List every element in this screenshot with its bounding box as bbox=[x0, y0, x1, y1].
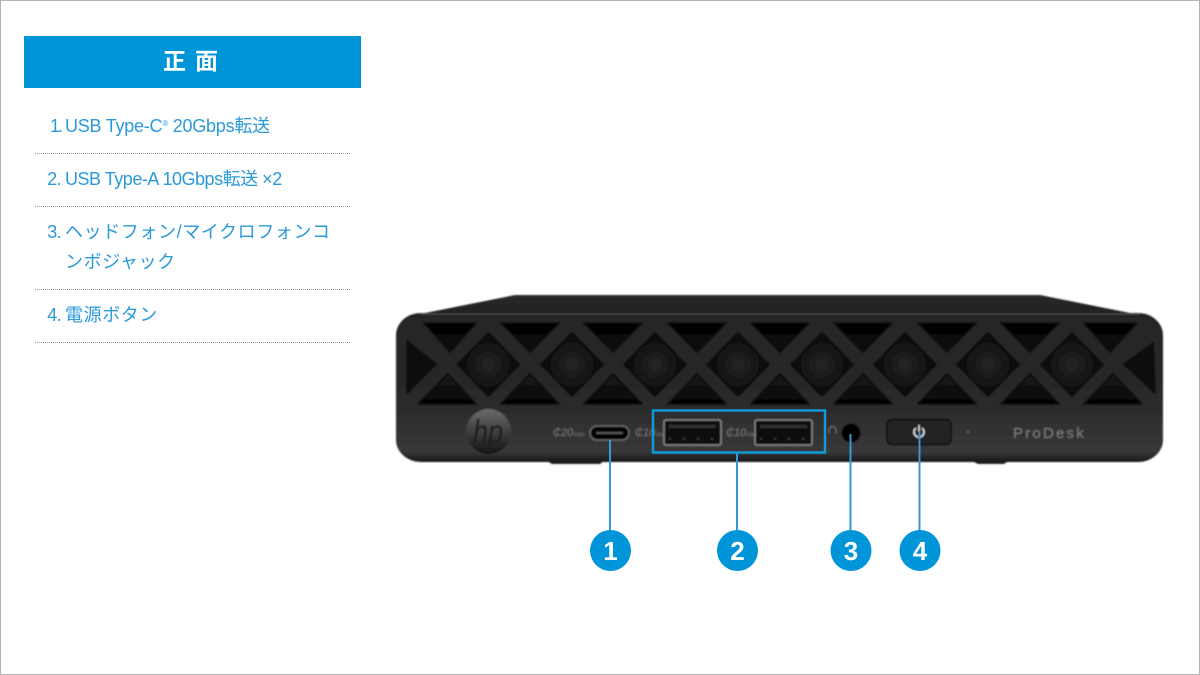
highlight box: USB-A ports bbox=[653, 410, 825, 452]
list item 3 bbox=[35, 207, 350, 290]
list item 4: 4. bbox=[47, 305, 61, 325]
panel: port list bbox=[35, 116, 350, 343]
list item 2: 2. bbox=[47, 169, 61, 189]
port speed labels: ₵10Gbps bbox=[635, 427, 668, 439]
USB-A port 1 bbox=[664, 420, 721, 445]
USB-A port 2 bbox=[755, 420, 812, 445]
port speed labels bbox=[553, 427, 759, 439]
USB-C port bbox=[590, 426, 629, 440]
list item 4: 電源ボタン bbox=[65, 305, 158, 325]
list item 1 bbox=[35, 101, 350, 154]
device front face bbox=[396, 313, 1163, 462]
ventilation grille bbox=[407, 323, 1155, 404]
power button bbox=[887, 420, 951, 444]
callout 2: 2 bbox=[730, 536, 745, 566]
audio jack bbox=[842, 424, 860, 442]
list item 3: 3. bbox=[47, 222, 61, 242]
list item 1: 1. bbox=[50, 116, 61, 136]
list item 1: USB Type-C® 20Gbps転送 bbox=[65, 116, 270, 136]
device: mini PC bbox=[396, 295, 1163, 464]
port speed labels: ₵10Gbps bbox=[726, 427, 759, 439]
HP logo: hp bbox=[473, 413, 503, 450]
device feet shadow bbox=[545, 460, 1010, 464]
ProDesk label: ProDesk bbox=[1013, 425, 1086, 442]
list item 3: ヘッドフォン/マイクロフォンコ bbox=[65, 222, 331, 242]
heading: front: 正面 bbox=[163, 48, 227, 74]
callout 3 bbox=[830, 434, 872, 571]
callout 1 bbox=[590, 440, 631, 571]
list item 2: USB Type-A 10Gbps転送 ×2 bbox=[65, 169, 282, 189]
callout 4 bbox=[900, 431, 940, 571]
list item 4 bbox=[35, 290, 350, 343]
icon: headphones bbox=[829, 426, 836, 434]
callout 4: 4 bbox=[913, 536, 928, 566]
heading: front bbox=[24, 36, 361, 88]
callout 1: 1 bbox=[603, 536, 618, 566]
device top face bbox=[410, 295, 1150, 322]
HP logo bbox=[466, 409, 511, 454]
port speed labels: ₵20Gbps ϟ bbox=[553, 427, 594, 439]
icon: power bbox=[914, 426, 924, 437]
list item 2 bbox=[35, 154, 350, 207]
callout 3: 3 bbox=[844, 536, 858, 566]
LED bbox=[967, 431, 969, 433]
list item 3: ンボジャック bbox=[65, 252, 176, 272]
callout 2 bbox=[717, 453, 758, 571]
